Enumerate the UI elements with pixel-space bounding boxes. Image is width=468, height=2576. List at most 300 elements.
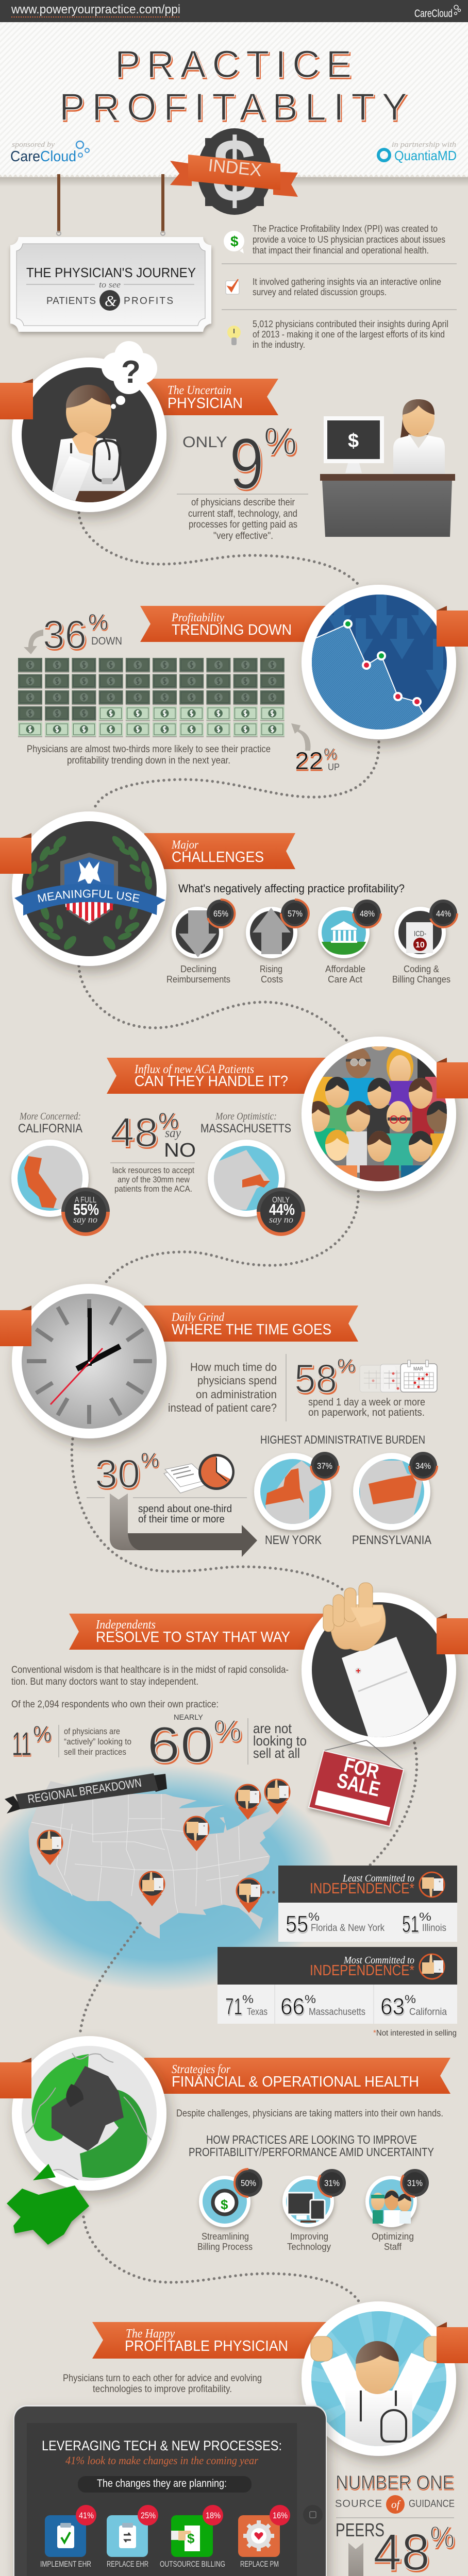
challenge: coding and billing changes: Billing Changes [392,974,450,985]
number one source of guidance: % [430,2520,455,2554]
tablet panel [13,2405,327,2576]
tablet subheading: 41% look to make changes in the coming year [65,2454,258,2467]
section: major challenges [0,810,458,985]
stat: california: % [405,1993,416,2006]
title: PRACTICE [115,43,352,86]
section title [171,1311,331,1338]
receptionist at desk [320,399,455,537]
icon: thumbs up [420,1954,444,1979]
panel: least committed to independence [278,1866,457,1942]
badge 44%: 44% [436,909,451,919]
strategy: streamlining billing [197,2169,262,2252]
badge 48% [353,900,381,927]
ribbon [69,1614,330,1650]
loose puzzle piece [7,2185,89,2245]
rule: beside arrow [87,1497,247,1498]
section title: CAN THEY HANDLE IT? [135,1073,288,1090]
question text: on administration [196,1388,277,1401]
ribbon [92,2322,330,2359]
app: implement ehr: IMPLEMENT EHR [40,2560,91,2569]
section: daily grind [0,1284,437,1557]
section: strategies [0,2036,450,2252]
stat description: current staff, technology, and [188,509,297,519]
badge 48%: 48% [360,909,375,919]
panel: california: More Concerned: [19,1111,81,1122]
stat: nearly 60%: are not [253,1721,292,1736]
stat: nearly 60%: % [213,1714,242,1748]
badge: 34%: 34% [415,1461,431,1471]
state: new york [254,1452,339,1547]
intro paragraph: tion. But many doctors want to stay independent. [11,1676,198,1687]
stat: nearly 60%: NEARLY [174,1713,203,1722]
number one source of guidance: SOURCE [335,2498,382,2510]
hanging sign [10,174,211,332]
challenge: rising costs: Rising [260,964,282,974]
sponsor: CareCloud [10,141,89,165]
section title: The Uncertain [168,384,231,397]
question text: How much time do [190,1361,277,1374]
map pin: california thumbs up [38,1831,62,1865]
stat: 48% say no: NO [164,1140,196,1161]
badge 50% [235,2169,262,2197]
stat: 48% say no: % [158,1108,179,1133]
stat: 36% down [43,609,122,657]
for sale sign [309,1740,404,1826]
title [59,43,407,128]
stat: florida and new york [286,1910,385,1937]
map pin: texas thumbs up [140,1872,164,1906]
circle illustration: doctor [12,358,166,512]
section: the uncertain physician [0,341,455,541]
section title: FINANCIAL & OPERATIONAL HEALTH [172,2074,419,2090]
panel: california: CALIFORNIA [18,1122,82,1136]
stat: 11%: “actively” looking to [64,1737,131,1747]
badge: 37%: 37% [317,1461,332,1471]
badge 31%: 31% [324,2178,340,2188]
app: implement ehr [40,2505,96,2569]
footnote: *Not interested in selling [373,2029,457,2038]
icon: dollar speech bubble [224,231,244,253]
stat: 48% say no: 48 [110,1109,158,1155]
ribbon [144,379,278,415]
badge 57% [281,900,309,927]
section title: Profitability [171,611,225,624]
ropes [57,174,165,235]
badge 65%: 65% [213,909,228,919]
section title: Daily Grind [171,1311,224,1324]
hand [323,1583,386,1651]
badge 31%: 31% [407,2178,423,2188]
challenge: affordable care act: Care Act [328,974,362,985]
badge 50%: 50% [241,2178,256,2188]
stat: 30%: % [141,1449,159,1472]
icon: calendars: MAR [413,1366,423,1372]
number one source of guidance [335,2472,455,2576]
stat: massachusetts: 66 [280,1993,305,2020]
number one source of guidance: GUIDANCE [409,2498,455,2510]
badge: 37% [311,1452,339,1480]
challenge: coding and billing changes: ICD- [414,929,426,938]
left ribbon fold [0,833,31,874]
badge 31% [401,2169,429,2197]
ribbon [144,833,295,869]
stat: illinois: % [419,1910,431,1923]
stat: 58%: on paperwork, not patients. [308,1407,425,1418]
stat description: "very effective". [213,531,273,541]
circle illustration: puzzle dollar [12,2036,166,2191]
panel: california [11,1111,110,1236]
30% description: of their time or more [138,1514,225,1525]
badge: 44% [257,1188,305,1236]
section title [134,1063,288,1090]
circle illustration: crowd of patients [302,1036,456,1191]
us map [28,1781,283,1939]
stat: california: California [409,2007,447,2018]
intro text one: that impact their financial and operational health. [253,245,429,256]
strategy: optimizing staff [365,2169,429,2252]
index badge [170,121,298,221]
stat: 58%: % [337,1355,356,1376]
for sale sign: SALE [335,1769,382,1801]
circle illustration: meaningful use seal [8,810,177,979]
app: outsource billing: $ [187,2531,195,2546]
stat: 48% say no: say [165,1126,181,1140]
intro text two: survey and related discussion groups. [253,287,387,297]
number one source of guidance: NUMBER ONE [336,2472,454,2494]
stat: 11%: sell their practices [64,1747,126,1757]
stat: nearly 60% [147,1713,307,1773]
section title: The Happy [126,2327,175,2341]
circle illustration: declining chart [302,585,456,742]
thought bubble [102,341,157,409]
arrow: turn right [110,1494,257,1557]
section title: PHYSICIAN [168,395,243,412]
section title: Major [171,838,199,851]
number one source of guidance: PEERS [336,2519,385,2540]
challenge: rising costs: Costs [261,974,283,985]
panel: massachusetts [200,1111,305,1236]
hanging sign: PROFITS [124,296,173,307]
section title [171,611,292,638]
strategy: streamlining billing: Billing Process [197,2242,253,2252]
stat: 30%: 30 [95,1451,140,1496]
badge: 55% [61,1188,110,1236]
for sale sign: FOR [342,1754,381,1784]
stat: california [380,1993,447,2020]
sponsor: CareCloud: sponsored by [12,141,55,149]
strategy: optimizing staff: Optimizing [372,2231,414,2242]
heading: highest administrative burden: HIGHEST ADMINISTRATIVE BURDEN [260,1433,425,1446]
ribbon [144,1306,358,1342]
thought bubble: ? [121,354,141,390]
stat: 58% [294,1355,425,1418]
stat: 58%: 58 [294,1355,337,1401]
app: replace pm: 16% [273,2511,288,2520]
intro paragraph: Of the 2,094 respondents who own their own practice: [11,1699,219,1710]
top white striped header panel [0,22,468,187]
section title: Independents [95,1618,156,1632]
badge: 55%: say no [73,1214,97,1225]
section title: Strategies for [172,2063,231,2076]
strategy: improving technology: Improving [290,2231,328,2242]
tablet home button [303,2505,323,2524]
state: new york: NEW YORK [265,1533,322,1547]
stat: 11%: 11 [12,1725,31,1762]
stat description: of physicians describe their [191,497,295,508]
stat: 22% up [295,745,340,775]
right ribbon fold [437,1058,468,1098]
stat: california: 63 [380,1993,405,2020]
section title: CHALLENGES [172,849,264,866]
arrow: up to bills [291,723,311,751]
app: replace ehr: 25% [141,2511,156,2520]
map pin: new york thumbs down [236,1785,260,1820]
badge: 55%: 55% [73,1200,99,1218]
computer monitor [324,416,384,473]
section title [168,384,243,412]
stat: 48% say no [110,1108,196,1194]
stat: 36% down: DOWN [91,635,122,647]
intro text three: of 2013 - making it one of the largest efforts of its kind [253,329,445,340]
section: independents [11,1583,468,1773]
question text: instead of patient care? [168,1401,277,1414]
money bills grid [18,658,285,737]
left ribbon fold [0,2058,31,2098]
stat: texas [225,1993,268,2020]
stat: massachusetts: Massachusetts [309,2007,365,2018]
icon: check box [226,279,239,294]
dotted journey path [72,513,417,2303]
panel: most committed to independence: Most Committed to [343,1955,414,1966]
right ribbon fold [437,606,468,647]
icon: dollar speech bubble: $ [230,233,239,249]
bills caption: Physicians are almost two-thirds more likely to see their practice [27,744,271,755]
stethoscope [361,2391,406,2442]
map glow [0,1765,338,1991]
hanging sign: to see [99,280,121,290]
banner [14,884,165,916]
section text: Physicians turn to each other for advice and evolving [63,2373,262,2384]
panel: most committed to independence [218,1947,457,2024]
stat: 48% say no: lack resources to accept [112,1165,194,1175]
pill: changes planned [78,2476,252,2493]
badge: 34% [409,1452,437,1480]
stat: texas: Texas [247,2007,268,2018]
stat: nearly 60%: 60 [147,1716,213,1773]
section: happy profitable physician [63,2301,468,2456]
strategy: optimizing staff: Staff [384,2242,402,2252]
stat: only 9%: % [264,419,297,463]
challenge: affordable care act [318,900,381,985]
partner: QuantiaMD: QuantiaMD [394,148,457,163]
stat: only 9% [182,419,297,504]
challenge: coding and billing changes [392,900,457,985]
icon: papers and clock [164,1454,235,1493]
stat: illinois: 51 [402,1911,419,1937]
stat: 30% [95,1449,159,1496]
stat: massachusetts [280,1993,365,2020]
stat: texas: % [242,1993,254,2006]
stat: illinois: Illinois [422,1923,446,1934]
circle illustration: raised fist [302,1583,456,1752]
icon: thumbs down [420,1872,444,1897]
section title [171,838,264,866]
stat: 22% up: 22 [295,748,323,775]
intro paragraph: Conventional wisdom is that healthcare is in the midst of rapid consolida- [11,1665,289,1675]
app: implement ehr: 41% [79,2511,94,2520]
strategy: improving technology: Technology [287,2242,331,2252]
intro list [222,224,457,350]
ribbon [107,1058,330,1094]
stat description: processes for getting paid as [189,519,297,530]
app: replace pm [238,2505,290,2569]
section: profitability trending down [18,585,468,775]
intro text one: The Practice Profitability Index (PPI) was created to [253,224,438,234]
stat: florida and new york: 55 [286,1911,308,1937]
state: pennsylvania: PENNSYLVANIA [352,1533,431,1547]
badge 65% [207,900,235,927]
badge 31% [318,2169,346,2197]
section title: Influx of new ACA Patients [134,1063,254,1076]
30% description: spend about one-third [138,1503,232,1515]
stat: 36% down: % [88,609,108,635]
hanging sign: & [105,293,117,310]
stat: florida and new york: Florida & New York [311,1923,385,1934]
title: PROFITABLITY [59,86,407,128]
app: replace ehr [107,2505,158,2569]
strategy: improving technology [282,2169,346,2252]
sponsor: CareCloud: CareCloud [10,148,76,165]
section title: RESOLVE TO STAY THAT WAY [96,1629,290,1646]
computer monitor: $ [348,430,359,452]
stat: only 9%: 9 [229,423,264,504]
app: outsource billing [160,2505,225,2569]
strategy: streamlining billing: Streamlining [202,2231,249,2242]
badge: 55%: A FULL [75,1196,96,1205]
top bar [0,0,468,22]
panel: massachusetts: More Optimistic: [215,1111,277,1122]
stat: nearly 60%: looking to [253,1733,307,1749]
pill: changes planned: The changes they are planning: [97,2478,227,2489]
stat: 58%: spend 1 day a week or more [308,1397,425,1408]
left ribbon fold [0,379,33,419]
right ribbon fold [437,2322,468,2363]
section: influx of new aca patients [11,1036,468,1236]
partner: QuantiaMD [378,141,457,163]
circle illustration: clock [12,1284,166,1438]
map pin: illinois thumbs down [184,1817,209,1851]
tablet heading: LEVERAGING TECH & NEW PROCESSES: [42,2438,282,2453]
section text: technologies to improve profitability. [93,2384,232,2395]
shield [60,853,118,925]
right ribbon fold [437,1614,468,1654]
map pin: massachusetts thumbs up [265,1780,290,1815]
app: outsource billing: OUTSOURCE BILLING [160,2560,225,2569]
badge 57%: 57% [288,909,303,919]
stat: 48% say no: patients from the ACA. [114,1184,192,1194]
challenge: rising costs [246,900,309,985]
stat: 36% down: 36 [43,612,87,657]
raised fists [311,2336,442,2361]
stat: 11%: % [33,1721,52,1747]
question heading: What's negatively affecting practice profitability? [178,882,405,895]
cuff button [355,1668,361,1674]
circle illustration: meaningful use seal: MEANINGFUL USE [38,889,140,903]
badge: 44%: 44% [269,1200,295,1218]
stat: 22% up: % [324,745,337,762]
section title: WHERE THE TIME GOES [172,1321,331,1338]
arrow: peers to contacts [297,2543,363,2576]
hanging sign: PATIENTS [46,296,96,307]
intro text two: It involved gathering insights via an interactive online [253,277,441,287]
regional breakdown banner [5,1773,167,1814]
section title [172,2063,419,2090]
stat: nearly 60%: sell at all [253,1745,300,1761]
stat: 22% up: UP [328,762,340,772]
app: replace ehr: REPLACE EHR [107,2560,148,2569]
state: pennsylvania [352,1452,437,1547]
regional breakdown banner: REGIONAL BREAKDOWN [27,1776,142,1806]
ribbon [140,606,330,642]
stat: 11%: of physicians are [64,1726,120,1736]
strategy: streamlining billing: $ [221,2197,228,2212]
arrow: down to bills [24,630,43,654]
app: outsource billing: 18% [206,2511,221,2520]
puzzle seams [26,2053,152,2185]
challenge: coding and billing changes: Coding & [404,964,439,974]
section title: TRENDING DOWN [172,622,292,638]
challenge: declining reimbursements [166,900,235,985]
stat: massachusetts: % [305,1993,316,2006]
bills caption: profitability trending down in the next year. [67,755,230,766]
ribbon [144,2058,450,2094]
icon: calendars [360,1360,437,1392]
logo: CareCloud white: CareCloud [414,8,453,20]
stat: texas: 71 [225,1993,242,2020]
sign heading: THE PHYSICIAN'S JOURNEY [26,265,196,280]
map pin: florida thumbs down [237,1878,261,1913]
panel: least committed to independence: Least Committed to [342,1873,414,1884]
badge: 44%: ONLY [272,1196,290,1205]
challenge: declining reimbursements: Reimbursements [166,974,230,985]
stat: 11% [12,1721,131,1762]
panel: massachusetts: MASSACHUSETTS [200,1122,291,1136]
left ribbon fold [0,1306,31,1346]
improvement heading: HOW PRACTICES ARE LOOKING TO IMPROVE [206,2133,417,2146]
stat: illinois [402,1910,446,1937]
laurel wreath [26,834,153,952]
challenge: declining reimbursements: Declining [180,964,216,974]
challenge: affordable care act: Affordable [325,964,365,974]
panel: most committed to independence: INDEPENDENCE* [310,1962,414,1979]
clock hands [51,1308,120,1404]
section title [95,1618,290,1646]
number one source of guidance: of [391,2498,401,2511]
intro text three: in the industry. [253,340,305,350]
panel: least committed to independence: INDEPENDENCE* [310,1880,414,1897]
stat: only 9%: ONLY [182,434,227,451]
site url: www.poweryourpractice.com/ppi [11,3,180,16]
stat: 48% say no: any of the 30mm new [118,1175,190,1184]
partner: QuantiaMD: in partnership with [392,141,456,149]
section title: PROFITABLE PHYSICIAN [125,2338,288,2354]
circle illustration: happy doctor [302,2301,456,2456]
ribbon label: INDEX [207,156,263,180]
intro text three: 5,012 physicians contributed their insights during April [253,319,448,329]
badge 44% [429,900,457,927]
app: replace pm: REPLACE PM [240,2560,279,2569]
badge: 44%: say no [269,1214,293,1225]
